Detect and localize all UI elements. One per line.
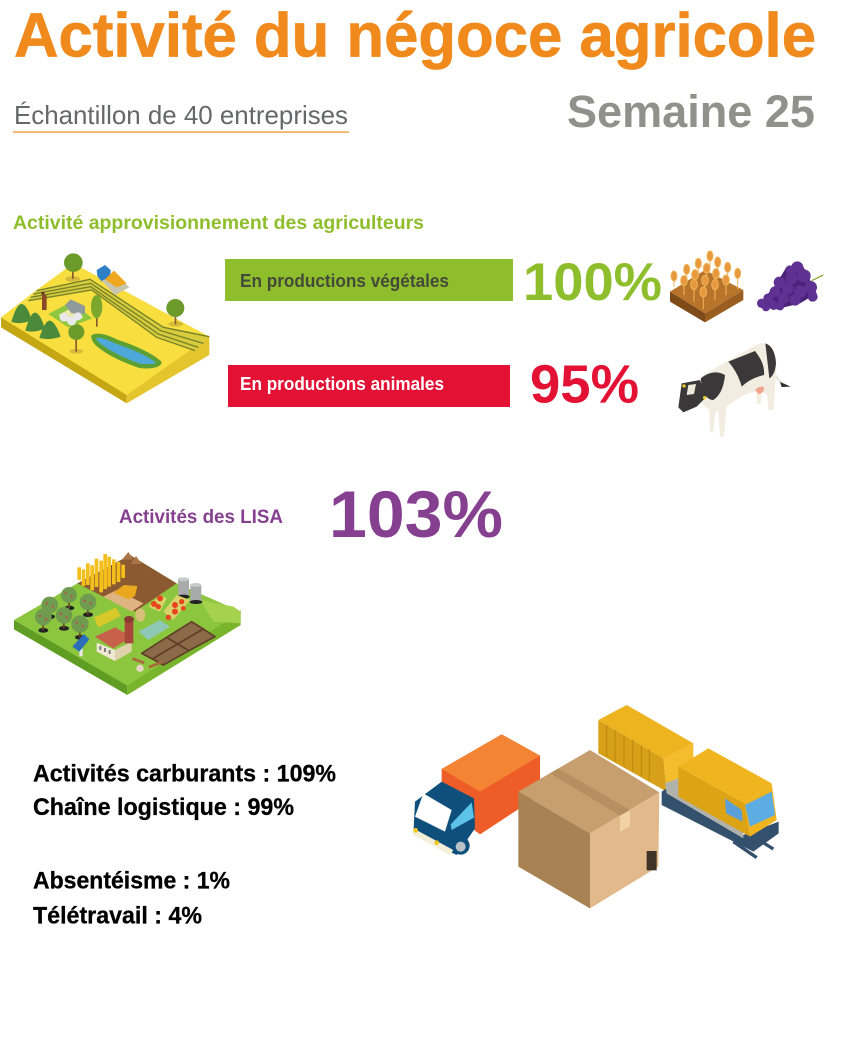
- value: animal production: 95%: [530, 354, 639, 414]
- bar: animal production: En productions animales: [240, 374, 444, 394]
- bar: crop production: En productions végétales: [240, 271, 449, 291]
- icon: grapes: [757, 261, 823, 311]
- icon: cow: [678, 343, 791, 437]
- icon: wheat plot: [670, 251, 743, 322]
- silos: [177, 577, 202, 604]
- remote work: Télétravail : 4%: [33, 902, 202, 930]
- absenteeism: Absentéisme : 1%: [33, 868, 230, 894]
- value: LISA activities: 103%: [329, 477, 503, 551]
- person: [41, 292, 47, 310]
- farmyard: [48, 299, 92, 327]
- supply chain: Chaîne logistique : 99%: [33, 794, 294, 821]
- ploughed plots: [142, 622, 215, 665]
- cardboard box: [518, 750, 659, 908]
- hedges: [11, 304, 61, 339]
- harvester: [113, 585, 137, 599]
- heading: farmer supply: Activité approvisionnement des agriculteurs: [13, 213, 424, 234]
- truck: [413, 734, 540, 855]
- heading: LISA activities: Activités des LISA: [119, 507, 283, 528]
- maize: [77, 554, 125, 592]
- orchard: [35, 587, 96, 640]
- value: crop production: 100%: [523, 253, 662, 312]
- fuel activities: Activités carburants : 109%: [33, 760, 336, 788]
- icon: logistics: [413, 705, 779, 908]
- bar: crop production: [225, 259, 513, 301]
- solar panel: [72, 634, 89, 656]
- icon: yellow farm landscape: [1, 253, 209, 403]
- title: Activité du négoce agricole: [14, 2, 816, 70]
- icon: mixed farm: [14, 552, 241, 695]
- pond: [93, 336, 159, 366]
- hay: [135, 608, 145, 622]
- subtitle: sample size: Échantillon de 40 entreprises: [14, 100, 348, 130]
- key figures: [33, 760, 336, 930]
- bar: animal production: [228, 365, 510, 407]
- train: [598, 705, 779, 858]
- flowers: [148, 595, 190, 620]
- truck: [97, 265, 129, 295]
- animal pen: [132, 657, 162, 672]
- crop cart: [94, 608, 121, 627]
- greenhouse: [138, 620, 170, 640]
- farmhouse: [95, 616, 134, 661]
- trees: [64, 253, 184, 354]
- week label: Semaine 25: [567, 86, 815, 137]
